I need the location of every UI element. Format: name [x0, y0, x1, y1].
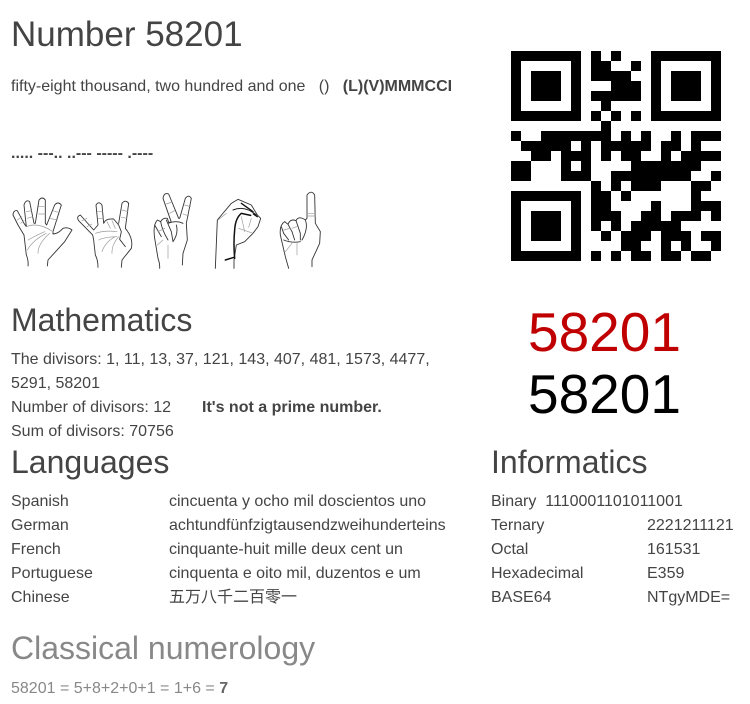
hand: two	[154, 194, 191, 268]
informatics table: Hexadecimal	[491, 565, 583, 582]
mathematics text: Sum of divisors: 70756	[11, 423, 174, 440]
languages table: Chinese	[11, 589, 70, 606]
languages table: 五万八千二百零一	[169, 589, 297, 606]
languages table: German	[11, 517, 69, 534]
informatics table: 161531	[647, 541, 700, 558]
hand: one	[280, 192, 320, 268]
informatics table: 2221211121	[647, 517, 734, 534]
informatics table: Binary 1110001101011001	[491, 493, 683, 510]
heading: languages: Languages	[11, 444, 169, 480]
informatics table	[491, 493, 734, 606]
mathematics text: Number of divisors: 12	[11, 399, 171, 416]
red number: 58201	[528, 301, 681, 363]
black number: 58201	[528, 363, 681, 425]
mathematics text: 5291, 58201	[11, 375, 100, 392]
languages table: cinquante-huit mille deux cent un	[169, 541, 403, 558]
languages table: Spanish	[11, 493, 69, 510]
morse code: ..... ---.. ..--- ----- .----	[11, 145, 153, 162]
informatics table: NTgyMDE=	[647, 589, 730, 606]
mathematics text: It's not a prime number.	[202, 399, 382, 416]
informatics table: BASE64	[491, 589, 551, 606]
heading: mathematics: Mathematics	[11, 302, 192, 338]
hand: eight	[78, 201, 132, 267]
mathematics text	[11, 351, 430, 440]
languages table: cinquenta e oito mil, duzentos e um	[169, 565, 421, 582]
informatics table: Octal	[491, 541, 528, 558]
languages table: cincuenta y ocho mil doscientos uno	[169, 493, 426, 510]
hand: five	[13, 198, 72, 266]
mathematics text: The divisors: 1, 11, 13, 37, 121, 143, 407, 481, 1573, 4477,	[11, 351, 430, 368]
number in words and roman numeral: fifty-eight thousand, two hundred and one () (L)(V)MMMCCI	[11, 78, 452, 95]
informatics table: Ternary	[491, 517, 544, 534]
title: Number 58201	[11, 15, 243, 54]
hand: zero	[215, 199, 261, 268]
heading: informatics: Informatics	[491, 444, 647, 480]
informatics table: E359	[647, 565, 684, 582]
languages table: French	[11, 541, 61, 558]
sign language hands	[12, 192, 321, 269]
languages table: achtundfünfzigtausendzweihunderteins	[169, 517, 446, 534]
languages table: Portuguese	[11, 565, 93, 582]
numerology sum: 58201 = 5+8+2+0+1 = 1+6 = 7	[11, 680, 228, 697]
heading: classical numerology: Classical numerology	[11, 630, 315, 666]
languages table	[11, 493, 446, 606]
QR code	[511, 51, 721, 261]
